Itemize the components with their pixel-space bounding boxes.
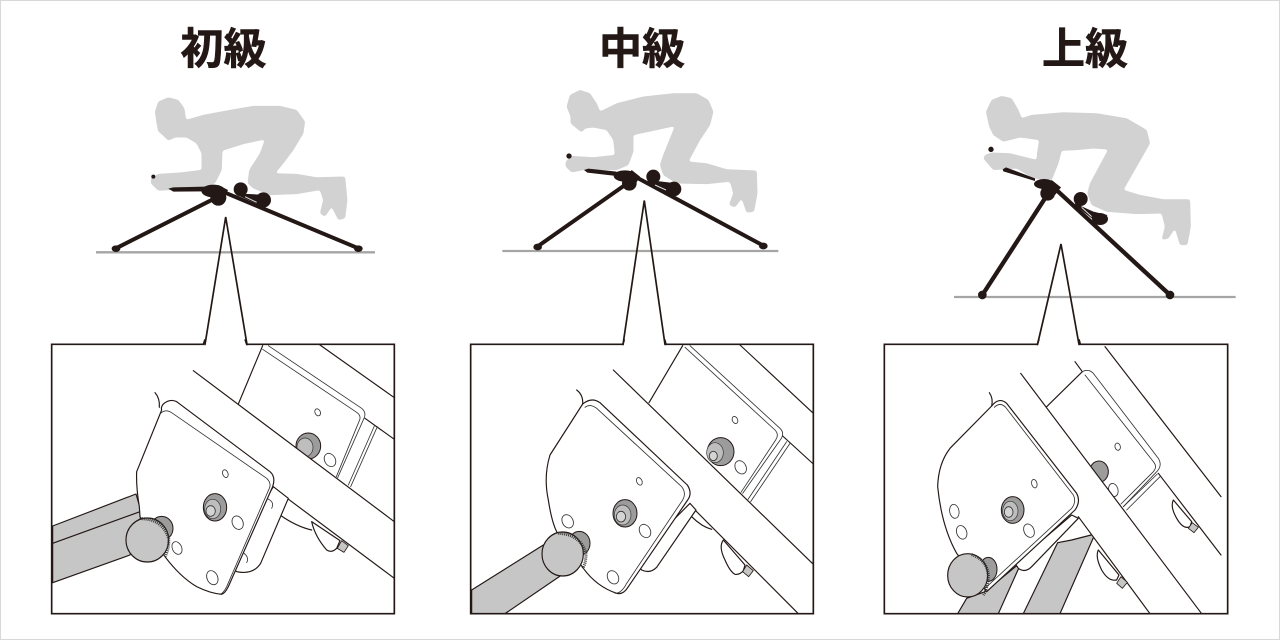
frame [471, 339, 813, 614]
title: intermediate: 中級 [599, 26, 685, 74]
main beam [193, 371, 394, 578]
rear wing bolt [1172, 500, 1198, 533]
frame [52, 339, 394, 614]
front plate [137, 393, 274, 594]
exercise bench [112, 175, 363, 252]
support tube [53, 494, 142, 583]
rear plate [1047, 362, 1160, 510]
column: intermediate [471, 26, 813, 614]
column: beginner [52, 26, 394, 614]
detail panel [471, 339, 813, 614]
adjustment knob [126, 516, 173, 562]
rear flange [633, 503, 696, 571]
rear plate [238, 345, 394, 487]
detail panel [52, 339, 394, 614]
rear plate [649, 345, 813, 502]
front plate [546, 390, 690, 594]
adjustment knob [948, 554, 997, 597]
person silhouette [566, 90, 757, 213]
pointer [623, 200, 665, 344]
figure: beginner posture [96, 97, 375, 252]
person silhouette [151, 97, 347, 220]
figure: advanced posture [954, 96, 1236, 299]
adjustment knob [542, 531, 590, 576]
pointer [205, 217, 247, 344]
lower wing bolt [1097, 550, 1127, 588]
lower bracket [280, 515, 348, 552]
exercise bench [533, 153, 768, 250]
title: beginner: 初級 [180, 26, 266, 74]
main beam [607, 370, 813, 614]
pointer [1038, 244, 1079, 344]
lower bracket [692, 517, 753, 577]
detail panel [884, 339, 1228, 614]
ground line [954, 293, 1236, 300]
figure: intermediate posture [502, 90, 778, 251]
support tubes [958, 534, 1095, 614]
support tube [472, 545, 562, 614]
frame [884, 339, 1228, 614]
rear flange [1015, 515, 1078, 570]
person silhouette [983, 96, 1191, 245]
title: advanced: 上級 [1042, 26, 1128, 74]
main beam [1008, 373, 1202, 614]
ground line [96, 249, 375, 256]
rear flange [227, 487, 288, 572]
ground line [502, 247, 778, 254]
flange holes [242, 498, 273, 563]
rear frame lines [1105, 347, 1221, 555]
front plate [938, 393, 1078, 592]
column: advanced [884, 26, 1236, 614]
exercise bench [978, 147, 1174, 299]
